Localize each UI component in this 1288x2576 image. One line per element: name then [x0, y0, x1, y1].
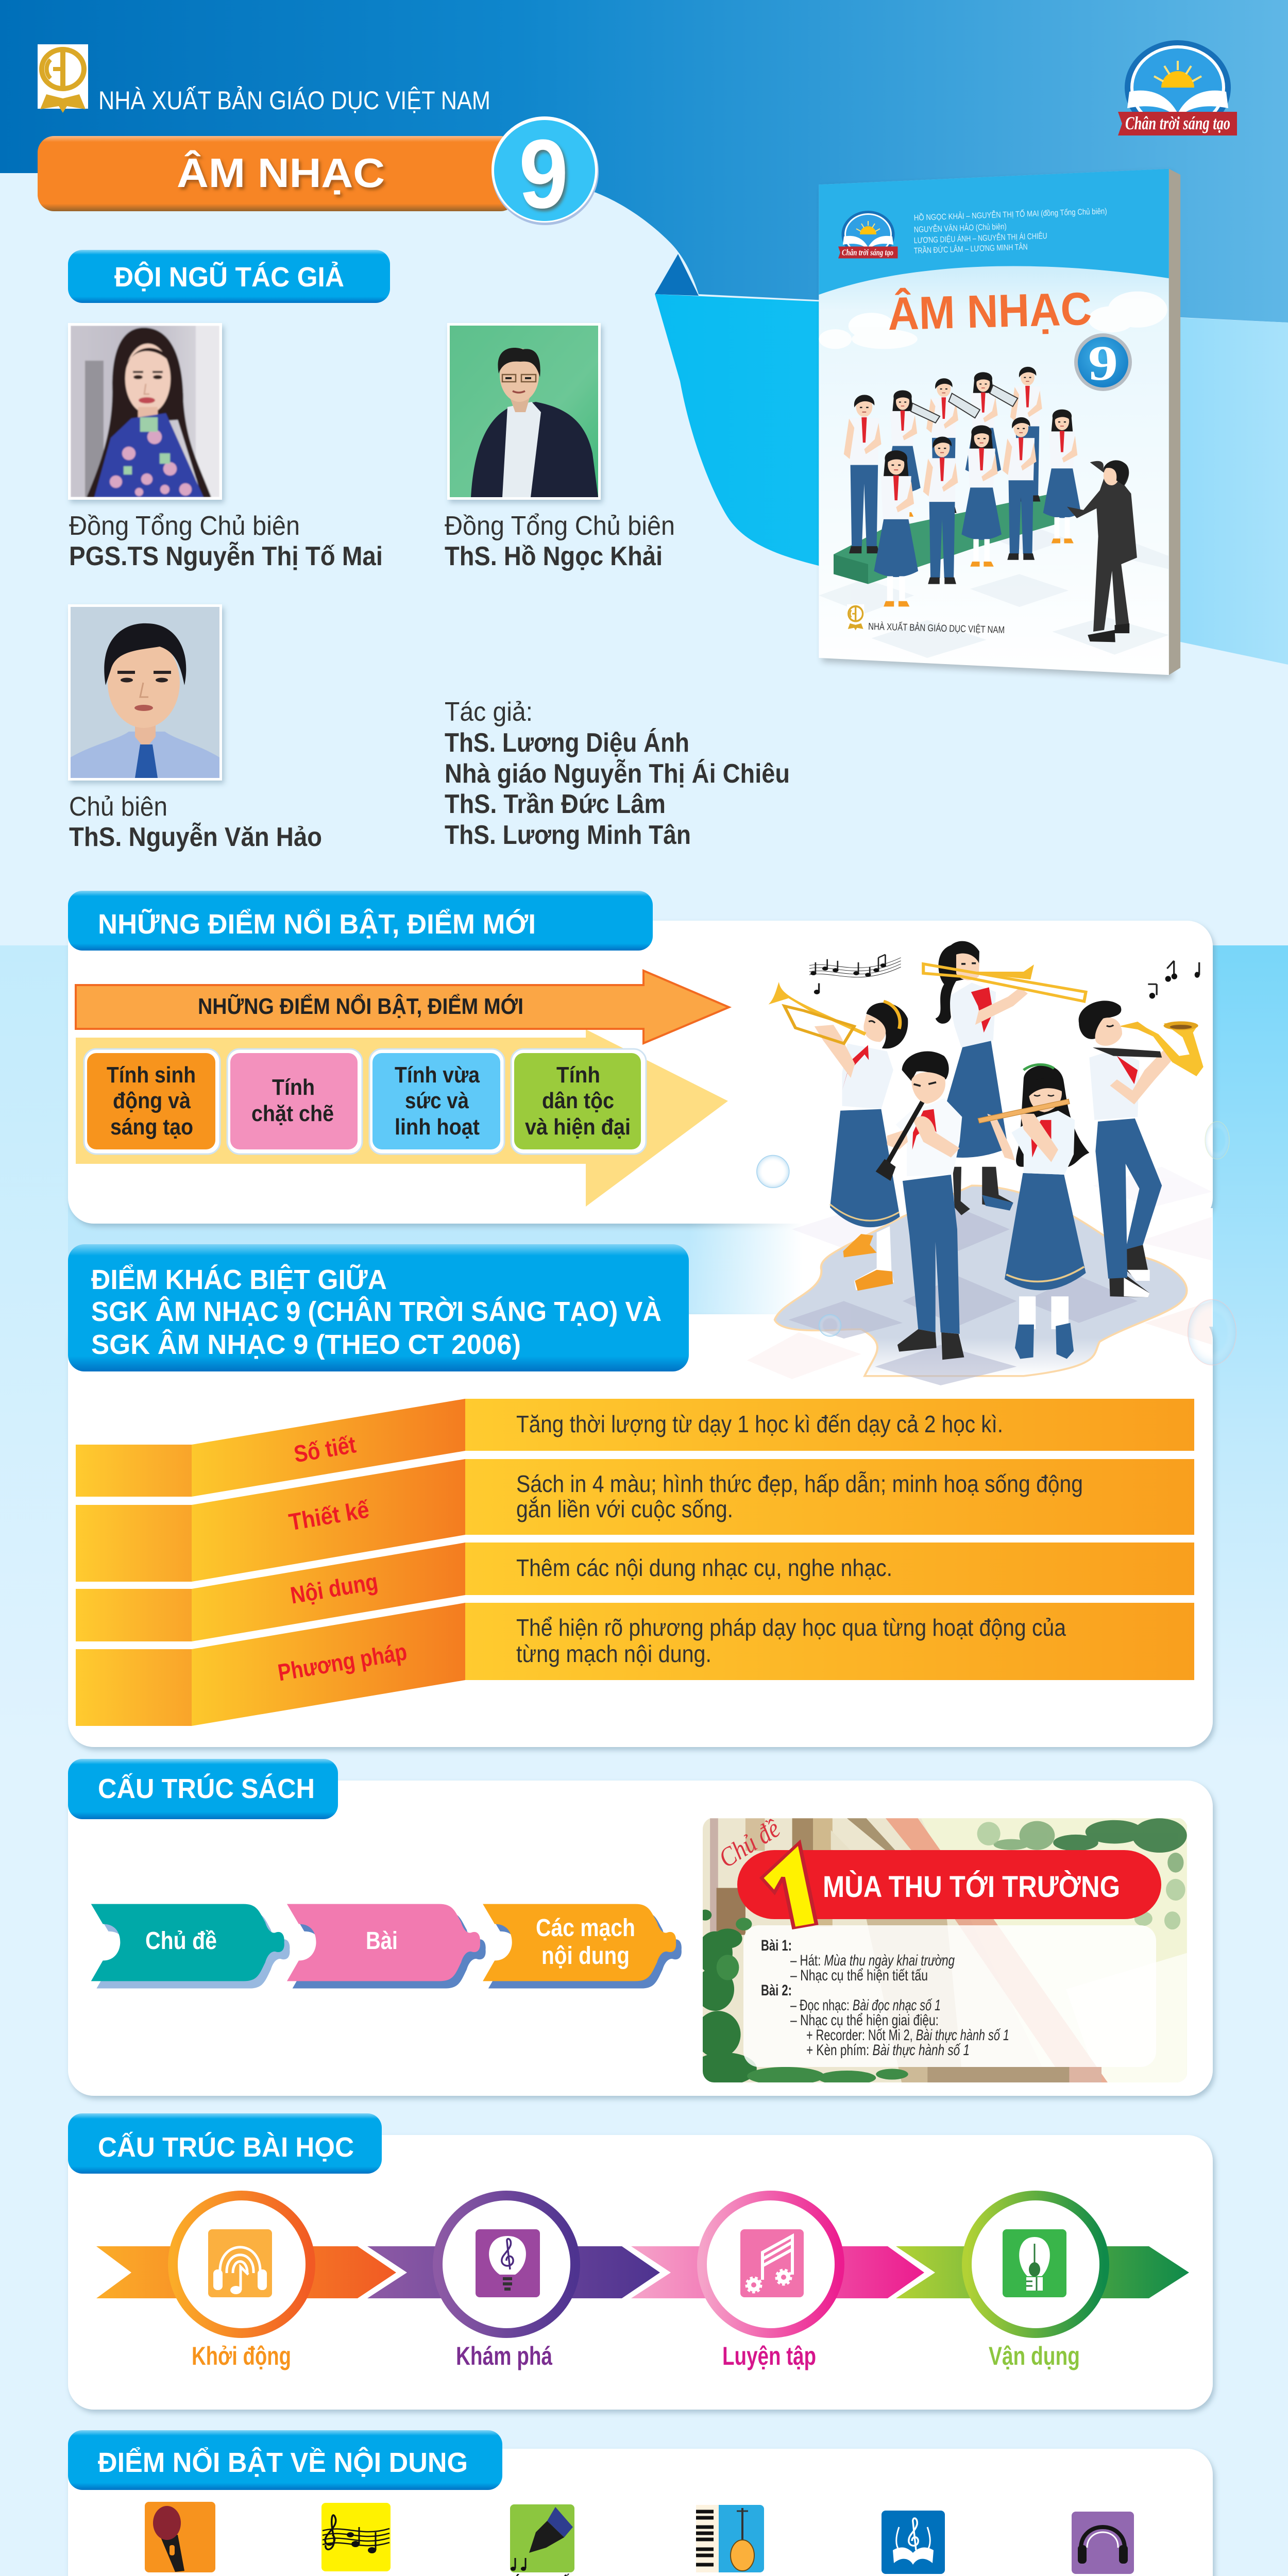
card: chủ đề 1: + Recorder: Nốt Mi 2, Bài thực hành số 1: [806, 2027, 1009, 2044]
puzzle flow: Chủ đề: [145, 1927, 217, 1955]
card: tính chặt chẽ: chặt chẽ: [251, 1101, 334, 1126]
caption: Tổng Chủ biên 2: ThS. Hồ Ngọc Khải: [445, 541, 663, 571]
step: khám phá: Khám phá: [456, 2342, 552, 2370]
caption: Chủ biên: Chủ biên: [69, 792, 167, 822]
music notes decoration: [809, 955, 1199, 998]
student: sax boy: [1079, 1001, 1204, 1297]
photo: Nguyễn Văn Hảo: [68, 604, 222, 781]
tab: highlights: NHỮNG ĐIỂM NỔI BẬT, ĐIỂM MỚI: [98, 908, 536, 940]
student: flute girl: [978, 1064, 1089, 1359]
row: Số tiết: [76, 1399, 1194, 1497]
card: tính vừa sức: linh hoạt: [395, 1114, 480, 1140]
series logo: Chân trời sáng tạo: Chân trời sáng tạo: [1125, 113, 1230, 133]
card: tính vừa sức: sức và: [405, 1088, 469, 1113]
orange headline arrow: [76, 971, 729, 1043]
step: vận dụng: [896, 2196, 1189, 2370]
step: khám phá: [367, 2196, 660, 2370]
icon: headphones: [1072, 2512, 1134, 2574]
tab: lesson structure: [68, 2113, 382, 2174]
card: tính sinh động: Tính sinh: [107, 1062, 196, 1088]
caption: Tổng Chủ biên 1: PGS.TS Nguyễn Thị Tố Mai: [69, 541, 383, 571]
tab: content highlights: ĐIỂM NỔI BẬT VỀ NỘI DUNG: [98, 2447, 468, 2478]
caption: Tổng Chủ biên 2: Đồng Tổng Chủ biên: [445, 511, 675, 541]
row: Phương pháp: từng mạch nội dung.: [516, 1640, 711, 1667]
header blue swoosh: [0, 0, 1288, 323]
book cover title: ÂM NHẠC: [887, 282, 1092, 340]
photo: Nguyễn Thị Tố Mai: [68, 323, 222, 500]
caption: Tác giả: ThS. Lương Diệu Ánh: [445, 728, 689, 758]
row: Nội dung: Thêm các nội dung nhạc cụ, nghe nhạc.: [516, 1554, 892, 1581]
student: trumpet girl: [769, 982, 908, 1291]
subject banner: ÂM NHẠC: [177, 150, 385, 196]
illustration backdrop between panels: [689, 1208, 1213, 1327]
panel: highlights: [68, 921, 1213, 1224]
icon: music sheet: [321, 2503, 391, 2571]
photo: Hồ Ngọc Khải: [447, 323, 601, 500]
step: khởi động: Khởi động: [192, 2342, 291, 2370]
tab: book structure: [68, 1759, 338, 1819]
book cover authors: NGUYỄN VĂN HẢO (Chủ biên): [913, 222, 1007, 234]
card: tính vừa sức: [369, 1049, 504, 1154]
card: tính dân tộc: dân tộc: [542, 1088, 614, 1113]
tab: authors: [68, 250, 390, 303]
step: vận dụng: Vận dụng: [989, 2342, 1080, 2370]
tab: lesson structure: CẤU TRÚC BÀI HỌC: [98, 2132, 354, 2163]
row: Thiết kế: Sách in 4 màu; hình thức đẹp, hấp dẫn; minh hoạ sống động: [516, 1470, 1083, 1497]
step: luyện tập: [631, 2196, 924, 2370]
book cover publisher: [847, 604, 1005, 636]
main book cover: [819, 169, 1180, 679]
card: tính dân tộc: [511, 1049, 646, 1154]
card: chủ đề 1: – Đọc nhạc: Bài đọc nhạc số 1: [790, 1997, 941, 2014]
large numeral one: [761, 1843, 817, 1928]
row: Số tiết: Số tiết: [292, 1431, 358, 1468]
book cover logo: Chân trời sáng tạo: [842, 247, 893, 258]
row: Thiết kế: gắn liền với cuộc sống.: [516, 1496, 733, 1522]
row: Phương pháp: [76, 1603, 1194, 1726]
card: chủ đề 1: [692, 1814, 1187, 2085]
icon: music appreciation: [882, 2511, 945, 2574]
card: chủ đề 1: – Hát: Mùa thu ngày khai trường: [790, 1952, 955, 1969]
icon: pen nib: [510, 2504, 574, 2572]
caption: Tác giả: ThS. Trần Đức Lâm: [445, 789, 666, 819]
puzzle flow: Bài: [366, 1927, 398, 1955]
publisher logo: [38, 44, 88, 113]
caption: Tác giả: Nhà giáo Nguyễn Thị Ái Chiêu: [445, 759, 790, 789]
step: luyện tập: Luyện tập: [722, 2342, 816, 2370]
puzzle flow: Các mạch: [536, 1914, 635, 1942]
subject banner: [38, 136, 517, 211]
row: Thiết kế: Thiết kế: [287, 1496, 371, 1536]
step: khởi động: [96, 2196, 396, 2370]
grade badge 9: 9: [519, 120, 568, 229]
middle gradient band: [0, 945, 1288, 1752]
book cover badge 9: [1074, 333, 1132, 391]
icon: instruments: [696, 2505, 764, 2572]
publisher name: NHÀ XUẤT BẢN GIÁO DỤC VIỆT NAM: [98, 86, 490, 115]
puzzle flow: nội dung: [541, 1942, 630, 1970]
card: tính dân tộc: và hiện đại: [525, 1114, 631, 1140]
card: tính sinh động: [84, 1049, 220, 1154]
card: tính sinh động: động và: [113, 1088, 191, 1113]
caption: Chủ biên: ThS. Nguyễn Văn Hảo: [69, 822, 322, 852]
panel: content highlights: [68, 2449, 1213, 2576]
dark triangle accent: [655, 254, 699, 296]
book cover authors: LƯƠNG DIỆU ÁNH – NGUYỄN THỊ ÁI CHIÊU: [913, 231, 1047, 245]
card: chủ đề 1: Bài 1:: [761, 1937, 792, 1954]
caption: Tổng Chủ biên 1: Đồng Tổng Chủ biên: [69, 511, 300, 541]
caption: Tác giả: [445, 697, 790, 850]
card: chủ đề 1: – Nhạc cụ thể hiện tiết tấu: [790, 1967, 928, 1984]
tab: differences: [68, 1244, 689, 1371]
caption: Tác giả: ThS. Lương Minh Tân: [445, 820, 691, 850]
student: trombone girl: [923, 941, 1086, 1215]
book cover logo: [838, 211, 897, 259]
book cover authors: HỒ NGỌC KHẢI – NGUYỄN THỊ TỐ MAI (đồng Tổng Chủ biên): [913, 206, 1107, 223]
card: chủ đề 1: + Kèn phím: Bài thực hành số 1: [806, 2042, 970, 2059]
grade badge 9: [492, 116, 599, 229]
card: tính chặt chẽ: Tính: [272, 1075, 315, 1100]
tab: authors: ĐỘI NGŨ TÁC GIẢ: [114, 261, 344, 293]
card: tính dân tộc: Tính: [556, 1062, 600, 1088]
book cover authors: [913, 206, 1107, 256]
caption: Tác giả: Tác giả:: [445, 697, 533, 727]
row: Số tiết: Tăng thời lượng từ dạy 1 học kì đến dạy cả 2 học kì.: [516, 1411, 1003, 1437]
caption: Tổng Chủ biên 1: [69, 511, 383, 571]
row: Phương pháp: Phương pháp: [276, 1638, 409, 1686]
card: chủ đề 1: MÙA THU TỚI TRƯỜNG: [823, 1870, 1120, 1904]
book cover badge 9: 9: [1088, 335, 1118, 391]
bubbles: [757, 1122, 1236, 1365]
tab: highlights: [68, 891, 653, 951]
row: Thiết kế: [76, 1459, 1194, 1582]
row: Nội dung: [76, 1543, 1194, 1641]
tab: differences: SGK ÂM NHẠC 9 (CHÂN TRỜI SÁNG TẠO) VÀ: [91, 1296, 662, 1327]
row: Nội dung: Nội dung: [289, 1568, 380, 1609]
cyan swoosh: [655, 294, 1288, 665]
icon: microphone: [145, 2502, 215, 2572]
book cover publisher: NHÀ XUẤT BẢN GIÁO DỤC VIỆT NAM: [868, 621, 1005, 636]
card: tính sinh động: sáng tạo: [110, 1114, 193, 1140]
tab: differences: SGK ÂM NHẠC 9 (THEO CT 2006): [91, 1329, 521, 1360]
tab: content highlights: [68, 2430, 502, 2490]
student: clarinet boy: [876, 1051, 964, 1360]
card: chủ đề 1: – Nhạc cụ thể hiện giai điệu:: [790, 2012, 939, 2029]
yellow backing arrow: [76, 1029, 728, 1207]
panel: differences: [68, 1314, 1213, 1747]
orange headline arrow: NHỮNG ĐIỂM NỔI BẬT, ĐIỂM MỚI: [198, 993, 523, 1019]
panel: lesson structure: [68, 2135, 1213, 2410]
panel: book structure: [68, 1781, 1213, 2096]
card: tính vừa sức: Tính vừa: [395, 1062, 480, 1088]
card: chủ đề 1: Bài 2:: [761, 1982, 792, 1999]
book cover authors: TRẦN ĐỨC LÂM – LƯƠNG MINH TÂN: [913, 242, 1028, 256]
series logo: Chân trời sáng tạo: [1118, 40, 1237, 135]
tab: book structure: CẤU TRÚC SÁCH: [98, 1773, 315, 1804]
puzzle flow: [91, 1904, 682, 1989]
card: chủ đề 1: Chủ đề: [714, 1814, 786, 1874]
row: Phương pháp: Thể hiện rõ phương pháp dạy học qua từng hoạt động của: [516, 1614, 1066, 1641]
caption: Chủ biên: [69, 792, 322, 852]
caption: Tổng Chủ biên 2: [445, 511, 675, 571]
tab: differences: ĐIỂM KHÁC BIỆT GIỮA: [91, 1264, 387, 1295]
illustration: student band: [747, 941, 1236, 1385]
card: tính chặt chẽ: [227, 1049, 362, 1154]
